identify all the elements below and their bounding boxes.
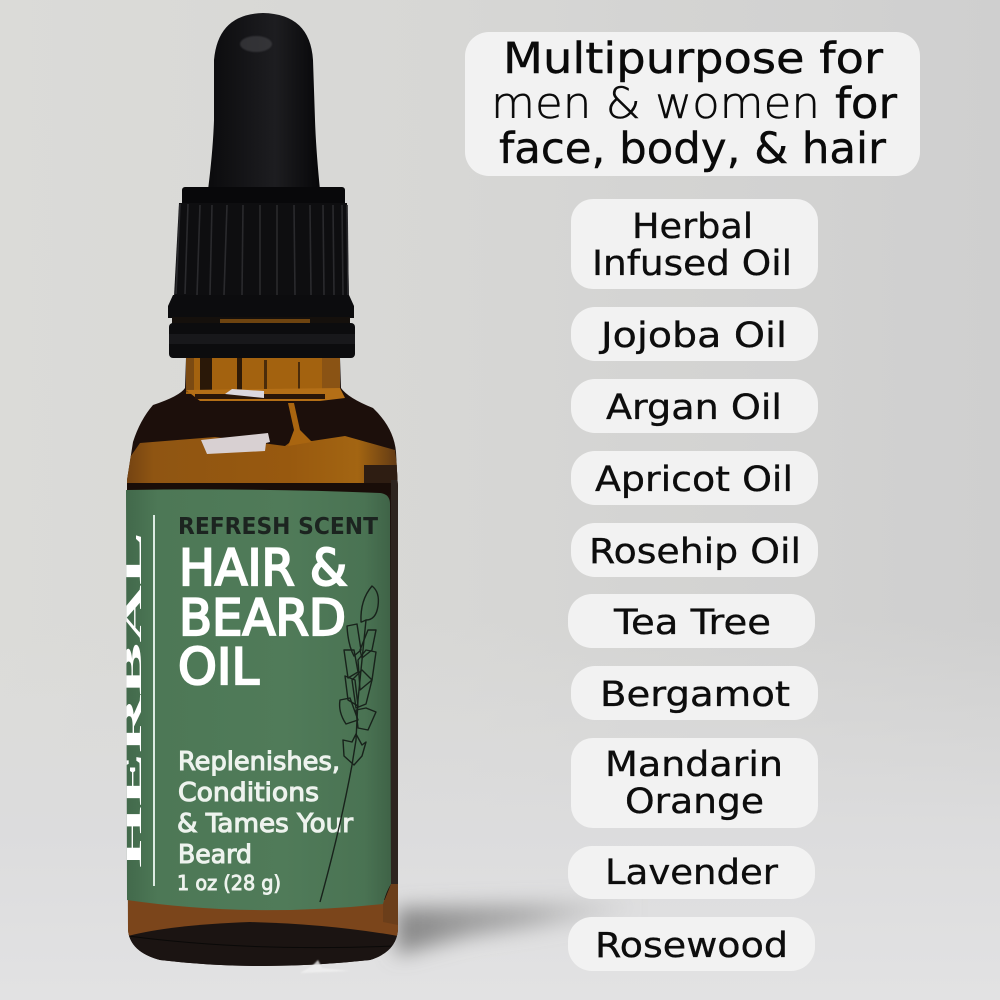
product description: Replenishes,	[178, 747, 340, 777]
ingredient: Jojoba Oil	[571, 307, 818, 361]
label	[120, 489, 391, 910]
ingredient: Herbal Infused Oil: Herbal	[632, 207, 753, 247]
ingredient: Jojoba Oil: Jojoba Oil	[599, 316, 787, 356]
glass bottle body	[120, 358, 410, 975]
headline pill: Multipurpose for	[503, 34, 883, 84]
ingredient: Herbal Infused Oil: Infused Oil	[592, 244, 792, 284]
scent name: REFRESH SCENT	[178, 514, 378, 540]
ingredient: Rosewood: Rosewood	[595, 926, 788, 966]
dropper bulb	[208, 13, 320, 190]
ingredient: Argan Oil	[571, 379, 818, 433]
ingredient: Apricot Oil: Apricot Oil	[595, 460, 793, 500]
product description: Conditions	[178, 778, 319, 808]
ingredient: Herbal Infused Oil	[571, 199, 818, 289]
product name: BEARD	[179, 589, 346, 647]
ingredient: Rosehip Oil	[571, 523, 818, 577]
ingredient: Bergamot: Bergamot	[600, 675, 790, 715]
ingredient: Mandarin Orange: Orange	[625, 782, 764, 822]
ingredient: Rosewood	[568, 917, 815, 971]
ingredient: Mandarin Orange: Mandarin	[605, 745, 783, 785]
product description	[177, 747, 353, 870]
label divider	[153, 515, 155, 886]
headline pill: men & women	[491, 79, 820, 129]
ingredient: Tea Tree	[568, 594, 815, 648]
ingredient: Bergamot	[571, 666, 818, 720]
dropper cap	[168, 187, 355, 358]
headline pill: face, body, & hair	[499, 124, 886, 174]
product description: & Tames Your	[177, 809, 353, 839]
product name: HAIR &	[179, 539, 347, 597]
product name	[178, 539, 347, 696]
ingredient: Apricot Oil	[571, 451, 818, 505]
net weight: 1 oz (28 g)	[177, 871, 281, 895]
ingredient: Tea Tree: Tea Tree	[613, 603, 771, 643]
product bottle	[120, 13, 410, 975]
ingredient: Mandarin Orange	[571, 738, 818, 828]
ingredient: Rosehip Oil: Rosehip Oil	[589, 532, 801, 572]
ingredient: Argan Oil: Argan Oil	[606, 388, 782, 428]
headline pill: for	[835, 79, 897, 129]
bulb highlight	[240, 36, 272, 52]
ingredient: Lavender: Lavender	[605, 853, 779, 893]
headline pill	[465, 32, 920, 176]
icon: lavender sprig	[320, 586, 378, 902]
product name: OIL	[178, 638, 259, 696]
glass highlights	[201, 433, 270, 454]
product description: Beard	[178, 840, 252, 870]
ingredient: Lavender	[568, 846, 815, 899]
base reflection	[300, 960, 350, 973]
brand name vertical: HERBAL	[120, 532, 147, 868]
